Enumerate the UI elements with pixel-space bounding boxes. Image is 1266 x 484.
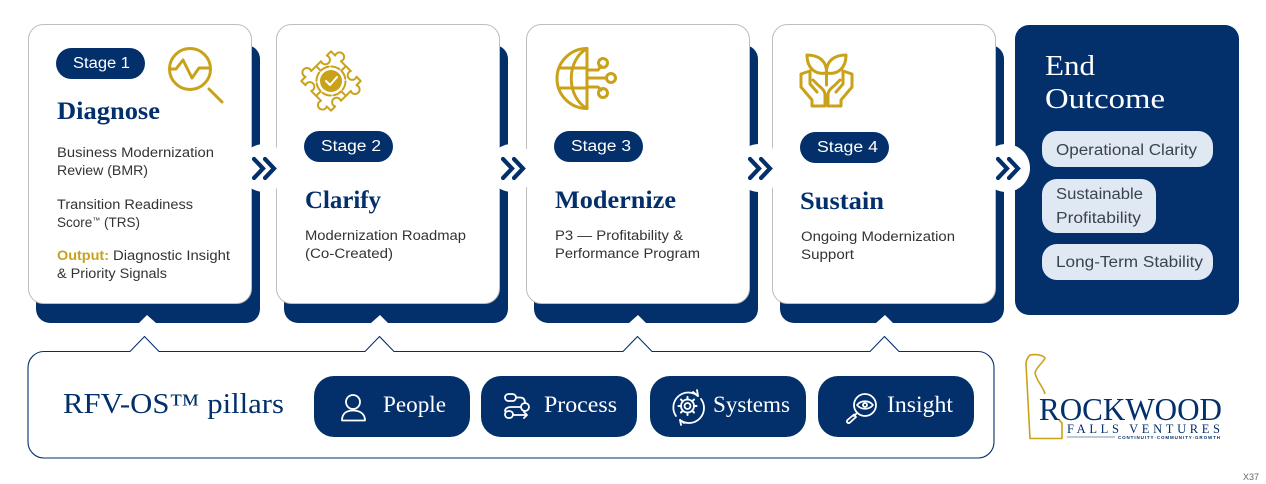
logo outline: Delaware xyxy=(1026,355,1062,438)
pillar: process: Process xyxy=(544,392,617,417)
arrow: stage 1 to stage 2 xyxy=(240,144,288,192)
text: stage 2 details: (Co-Created) xyxy=(305,246,393,261)
heading: Clarify: Clarify xyxy=(305,187,381,214)
heading: Modernize: Modernize xyxy=(555,187,676,214)
text: stage 1 details: Review (BMR) xyxy=(57,163,148,178)
icon: puzzle with check xyxy=(292,42,370,120)
outcome: operational clarity xyxy=(1042,131,1213,167)
footer code: X37 xyxy=(1243,472,1259,482)
text: stage 3 details xyxy=(555,228,700,261)
heading: End Outcome xyxy=(1045,50,1165,115)
outcome: sustainable profitability: Sustainable xyxy=(1056,186,1143,203)
heading: RFV-OS pillars: RFV-OS™ pillars xyxy=(63,389,284,420)
pillar: people xyxy=(314,376,470,437)
outcome: sustainable profitability xyxy=(1042,179,1156,233)
panel: stage 4 sustain xyxy=(772,24,996,304)
panel: stage 2 clarify xyxy=(276,24,500,304)
heading: Sustain: Sustain xyxy=(800,188,884,215)
pillar: insight xyxy=(818,376,974,437)
logo: Rockwood Falls Ventures xyxy=(1026,355,1222,440)
text: stage 1 details: & Priority Signals xyxy=(57,266,167,281)
text: stage 1 details: Business Modernization xyxy=(57,145,214,160)
arrow: stage 2 to stage 3 xyxy=(488,144,536,192)
heading: End Outcome: End xyxy=(1045,50,1096,82)
stage 4 badge xyxy=(800,132,889,163)
text: stage 3 details: P3 — Profitability & xyxy=(555,228,683,243)
outcome: operational clarity: Operational Clarity xyxy=(1056,142,1197,159)
icon: digital globe xyxy=(557,48,616,108)
arrow: stage 4 to end outcome xyxy=(982,144,1030,192)
logo subtitle: FALLS VENTURES xyxy=(1067,422,1220,436)
text: stage 4 details: Ongoing Modernization xyxy=(801,229,955,244)
text: stage 2 details: Modernization Roadmap xyxy=(305,228,466,243)
panel: stage 1 diagnose xyxy=(28,24,252,304)
stage 3 badge xyxy=(554,131,643,162)
icon: gear with cycle arrows xyxy=(673,390,704,425)
outcome: long-term stability: Long-Term Stability xyxy=(1056,254,1203,271)
panel: stage 2 backing xyxy=(284,45,508,323)
text: stage 4 details: Support xyxy=(801,247,854,262)
stage 2 badge xyxy=(304,131,393,162)
outcome: sustainable profitability: Profitability xyxy=(1056,210,1141,227)
text: stage 1 details: ™ xyxy=(92,216,100,225)
icon: process flow xyxy=(505,394,529,418)
heading: End Outcome: Outcome xyxy=(1045,83,1165,115)
panel: end outcome xyxy=(1015,25,1239,315)
logo tagline: CONTINUITY·COMMUNITY·GROWTH xyxy=(1118,435,1220,440)
pillar: process xyxy=(481,376,637,437)
text: stage 1 details: Output: xyxy=(57,248,109,263)
pillar: systems xyxy=(650,376,806,437)
text: stage 4 details xyxy=(801,229,955,262)
icon: person xyxy=(342,395,365,420)
stage 1 badge: Stage 1 xyxy=(73,55,130,72)
stage 4 badge: Stage 4 xyxy=(817,139,878,156)
heading: Diagnose: Diagnose xyxy=(57,98,160,125)
panel: stage 4 backing xyxy=(780,45,1004,323)
logo wordmark: ROCKWOOD xyxy=(1039,391,1222,427)
pillar: insight: Insight xyxy=(887,392,954,417)
pillar: people: People xyxy=(383,392,446,417)
text: stage 3 details: Performance Program xyxy=(555,246,700,261)
text: stage 1 details xyxy=(57,145,230,281)
text: stage 2 details xyxy=(305,228,466,261)
panel: stage 3 modernize xyxy=(526,24,750,304)
icon: magnifier with pulse xyxy=(170,48,222,102)
stage 2 badge: Stage 2 xyxy=(321,138,381,155)
pillar: systems: Systems xyxy=(713,392,790,417)
text: stage 1 details: Diagnostic Insight xyxy=(113,248,230,263)
text: stage 1 details: (TRS) xyxy=(100,215,140,230)
text: stage 1 details: Transition Readiness xyxy=(57,197,193,212)
panel: RFV-OS pillars xyxy=(28,336,994,458)
panel: stage 1 backing xyxy=(36,45,260,323)
stage 1 badge xyxy=(56,48,145,79)
icon: magnifier with eye xyxy=(847,394,876,423)
icon: hands holding plant xyxy=(801,55,852,106)
arrow: stage 3 to stage 4 xyxy=(735,144,783,192)
stage 3 badge: Stage 3 xyxy=(571,138,631,155)
outcome: long-term stability xyxy=(1042,244,1213,280)
panel: stage 3 backing xyxy=(534,45,758,323)
text: stage 1 details: Score xyxy=(57,215,92,230)
